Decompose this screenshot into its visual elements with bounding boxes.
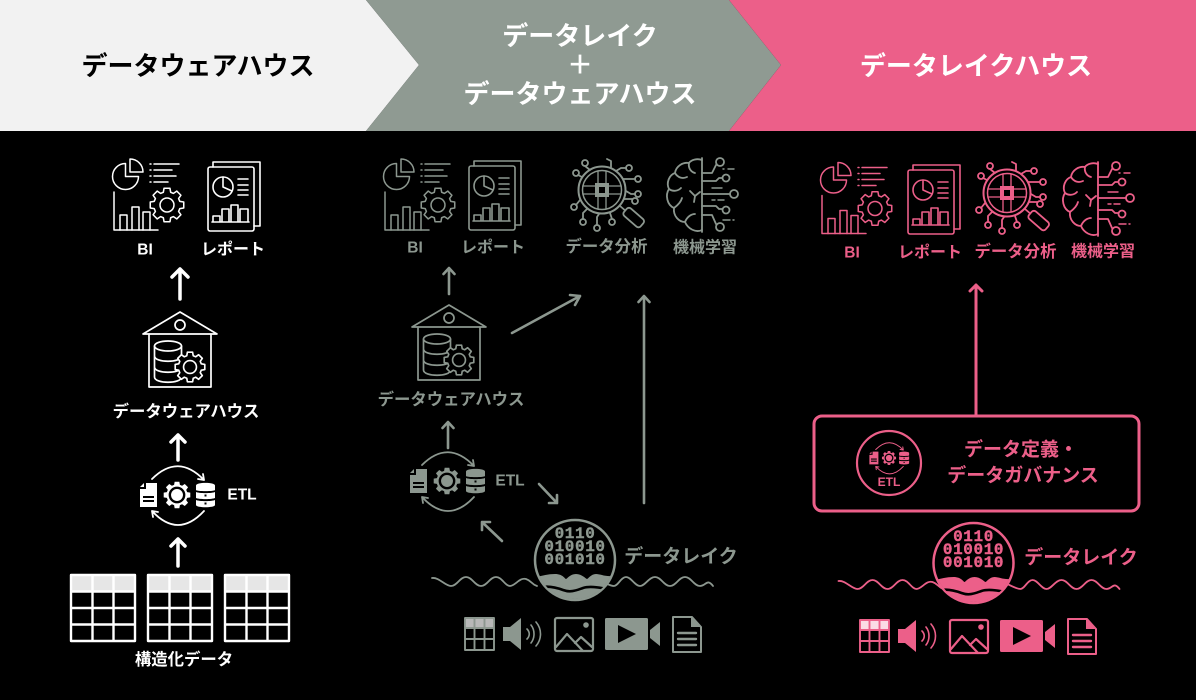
panel: data warehouse column bbox=[70, 159, 290, 669]
arrow: ETL to lake bbox=[539, 484, 557, 503]
icon: report bbox=[208, 162, 260, 231]
icon: ETL bbox=[140, 466, 215, 525]
panel: lake plus warehouse column bbox=[378, 158, 738, 652]
arrow: warehouse to analysis bbox=[512, 295, 580, 333]
wave: lake surface bbox=[838, 580, 1120, 589]
icon: BI bbox=[384, 159, 455, 230]
label: data lake: データレイク bbox=[1024, 546, 1138, 568]
wave: lake surface bbox=[432, 577, 713, 586]
header: データレイクハウス: データレイクハウス bbox=[860, 51, 1092, 81]
icons: file types bbox=[860, 619, 1096, 654]
icon: report bbox=[469, 161, 521, 230]
arrow: tables to ETL bbox=[171, 539, 185, 566]
label: data lake: データレイク bbox=[624, 544, 738, 568]
icon: data lake bbox=[533, 520, 617, 602]
icon: BI bbox=[112, 159, 184, 230]
header: データレイクハウス bbox=[729, 0, 1196, 131]
label: ETL: ETL bbox=[495, 472, 525, 490]
label: warehouse: データウェアハウス bbox=[378, 390, 524, 409]
label: report: レポート bbox=[201, 240, 265, 258]
arrow: ETL to warehouse bbox=[442, 422, 454, 448]
icon: warehouse bbox=[412, 305, 486, 380]
text: data definition and governance bbox=[947, 438, 1099, 486]
tables: structured data bbox=[70, 574, 290, 641]
label: structured data: 構造化データ bbox=[135, 650, 233, 669]
icon: ETL in circle bbox=[857, 431, 921, 495]
arrow: governance to consumers bbox=[970, 285, 982, 415]
header: データレイク＋データウェアハウス bbox=[366, 0, 781, 131]
arrow: lake to analysis bbox=[638, 296, 650, 503]
label: data analysis: データ分析 bbox=[975, 242, 1056, 261]
label: BI: BI bbox=[844, 244, 860, 262]
text: data definition and governance: データ定義・ bbox=[964, 438, 1078, 460]
icon: ETL bbox=[410, 452, 485, 511]
icon: machine learning bbox=[667, 158, 738, 232]
label: BI: BI bbox=[137, 242, 153, 258]
icon: ETL in circle: ETL bbox=[878, 475, 900, 489]
label: data analysis: データ分析 bbox=[566, 237, 647, 256]
header: データレイク＋データウェアハウス: データウェアハウス bbox=[464, 79, 696, 109]
label: ETL: ETL bbox=[227, 486, 257, 504]
arrow: lake to ETL bbox=[482, 522, 502, 541]
label: report: レポート bbox=[461, 238, 525, 256]
header: データウェアハウス: データウェアハウス bbox=[82, 51, 314, 81]
icon: warehouse bbox=[143, 312, 217, 387]
icon: data lake bbox=[932, 523, 1016, 605]
header: データレイク＋データウェアハウス: データレイク bbox=[502, 21, 658, 51]
label: machine learning: 機械学習 bbox=[673, 238, 737, 256]
icons: file types bbox=[465, 617, 701, 652]
icon: machine learning bbox=[1063, 162, 1134, 236]
header: データレイク＋データウェアハウス: ＋ bbox=[567, 50, 593, 80]
label: machine learning: 機械学習 bbox=[1071, 242, 1135, 260]
arrow: ETL to warehouse bbox=[171, 435, 185, 460]
panel: data definition and governance bbox=[814, 416, 1139, 511]
arrow: warehouse to BI bbox=[444, 268, 454, 294]
label: report: レポート bbox=[898, 244, 962, 262]
label: BI: BI bbox=[407, 240, 423, 256]
panel: lakehouse column bbox=[814, 162, 1139, 654]
icon: report bbox=[908, 165, 960, 234]
arrow: warehouse to BI bbox=[172, 269, 188, 299]
header: データウェアハウス bbox=[0, 0, 419, 131]
icon: BI bbox=[820, 162, 892, 234]
icon: data analysis bbox=[976, 162, 1050, 234]
label: warehouse: データウェアハウス bbox=[113, 402, 259, 421]
text: data definition and governance: データガバナンス bbox=[947, 464, 1099, 486]
icon: data analysis bbox=[571, 159, 645, 231]
